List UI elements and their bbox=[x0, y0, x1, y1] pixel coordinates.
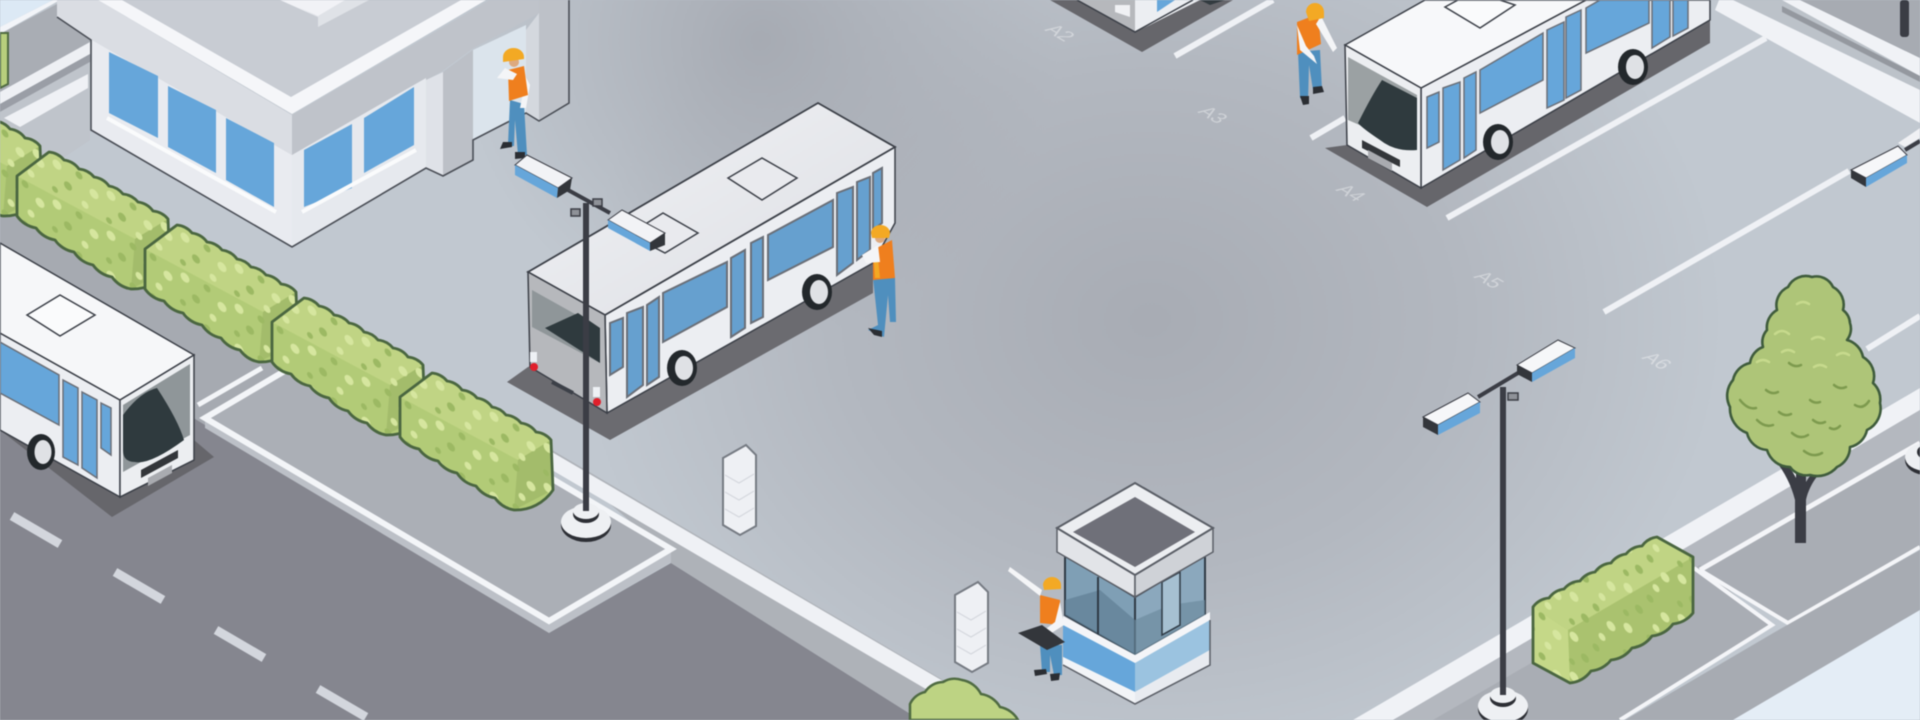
lamp arm bbox=[1478, 373, 1518, 397]
wheel bbox=[27, 434, 55, 470]
building: roof fascia right bbox=[292, 0, 540, 155]
road bbox=[0, 300, 920, 720]
bus at top centre, bay A2 (cropped) bbox=[1050, 0, 1233, 52]
lamp post right bbox=[1423, 340, 1575, 720]
booth roof inset bbox=[1073, 497, 1195, 567]
front bbox=[120, 355, 194, 497]
side glazing bbox=[0, 342, 111, 478]
roof bbox=[0, 243, 194, 400]
top-right ground bands bbox=[1715, 0, 1920, 123]
traffic island bbox=[198, 346, 671, 633]
hedge 1 bbox=[0, 79, 42, 216]
right bus, bay A4 bbox=[1325, 0, 1710, 207]
lamp head left bbox=[1423, 393, 1480, 435]
bollard near centre bbox=[723, 445, 756, 535]
building: window sills bbox=[107, 118, 416, 212]
tail lights bbox=[530, 352, 601, 406]
skylight bbox=[27, 295, 95, 336]
trunk bbox=[1768, 449, 1824, 543]
building: roof parapet bbox=[98, 0, 486, 114]
hedge 4 bbox=[272, 298, 425, 435]
centre bus bbox=[507, 103, 895, 440]
building: roof fascia left bbox=[57, 0, 292, 155]
worker by building bbox=[497, 48, 530, 159]
lamp head right bbox=[1517, 340, 1575, 382]
booth base bbox=[1063, 612, 1210, 704]
building: left windows bbox=[109, 52, 274, 207]
parking bay lines bbox=[1175, 0, 1920, 349]
building: column bbox=[426, 50, 473, 176]
hedge bottom right bbox=[1533, 537, 1693, 683]
crown shading arcs bbox=[1740, 363, 1869, 455]
bay label A2: A2 bbox=[1040, 21, 1079, 45]
building: left wall bbox=[91, 40, 292, 247]
worker with clipboard bbox=[1008, 567, 1065, 681]
hedge segments bbox=[0, 79, 553, 510]
cameras bbox=[571, 199, 602, 216]
bay label A4: A4 bbox=[1331, 181, 1370, 205]
bay label A5: A5 bbox=[1469, 268, 1508, 292]
pole bbox=[1500, 387, 1506, 695]
lamp head left bbox=[515, 155, 572, 198]
building: door bbox=[473, 25, 526, 140]
bollard by booth bbox=[955, 582, 988, 672]
booth glass bbox=[1065, 555, 1205, 655]
lamp head right bbox=[608, 210, 665, 251]
lamp head, right edge bbox=[1851, 128, 1920, 187]
hedge 5 bbox=[400, 373, 553, 510]
tree bbox=[1727, 276, 1881, 543]
building: upper block fascia bbox=[298, 0, 369, 27]
sidewalk strip beside road bbox=[0, 200, 671, 635]
building: base outline bbox=[57, 0, 569, 247]
lamp base bbox=[1478, 687, 1528, 720]
building: right block bbox=[526, 0, 569, 121]
side glazing bbox=[1427, 0, 1688, 170]
crown bbox=[1727, 276, 1881, 476]
hedge at bottom edge bbox=[910, 679, 1018, 720]
rear plate bbox=[552, 382, 573, 393]
side bbox=[605, 147, 895, 413]
side bbox=[0, 333, 120, 497]
building bbox=[57, 0, 569, 247]
side bbox=[1421, 0, 1710, 188]
kerb band between lot and road bbox=[540, 443, 960, 720]
crown highlights bbox=[1757, 302, 1849, 367]
booth roof fascia bbox=[1057, 528, 1213, 597]
bottom-right ground: bands, walks, corner bbox=[1353, 388, 1920, 720]
skylight bbox=[1445, 0, 1515, 28]
lamp base, right edge bbox=[1905, 443, 1920, 475]
bay label A6: A6 bbox=[1637, 349, 1676, 373]
lamp post centre bbox=[515, 155, 665, 542]
bay label A3: A3 bbox=[1193, 103, 1232, 127]
skylights bbox=[728, 158, 797, 200]
road centre dashes bbox=[12, 516, 366, 717]
hedge 3 bbox=[145, 225, 298, 362]
worker beside centre bus bbox=[862, 225, 896, 337]
lamp arm bbox=[568, 190, 610, 213]
roof bbox=[528, 103, 895, 315]
wheels bbox=[667, 274, 832, 386]
shadow bbox=[1325, 20, 1710, 207]
camera bbox=[1508, 393, 1518, 400]
bus left, at the kerb bbox=[0, 243, 214, 517]
rear face bbox=[528, 272, 607, 413]
roof bbox=[1345, 0, 1586, 88]
guard booth bbox=[1057, 483, 1213, 704]
top-left corner ground bbox=[0, 0, 90, 200]
building: right wall bbox=[292, 78, 426, 247]
building: roof top bbox=[122, 0, 461, 97]
shadow bbox=[0, 425, 214, 517]
wheels bbox=[1483, 49, 1648, 160]
lamp base bbox=[561, 503, 611, 542]
pole bbox=[583, 203, 589, 511]
front bbox=[1345, 45, 1421, 188]
hedge 2 bbox=[17, 152, 170, 289]
side glazing bbox=[610, 168, 882, 397]
booth roof bbox=[1057, 483, 1213, 575]
building: upper roof block bbox=[280, 0, 369, 17]
shadow bbox=[507, 263, 873, 440]
building: right windows bbox=[304, 87, 414, 207]
worker by right bus bbox=[1297, 3, 1337, 105]
